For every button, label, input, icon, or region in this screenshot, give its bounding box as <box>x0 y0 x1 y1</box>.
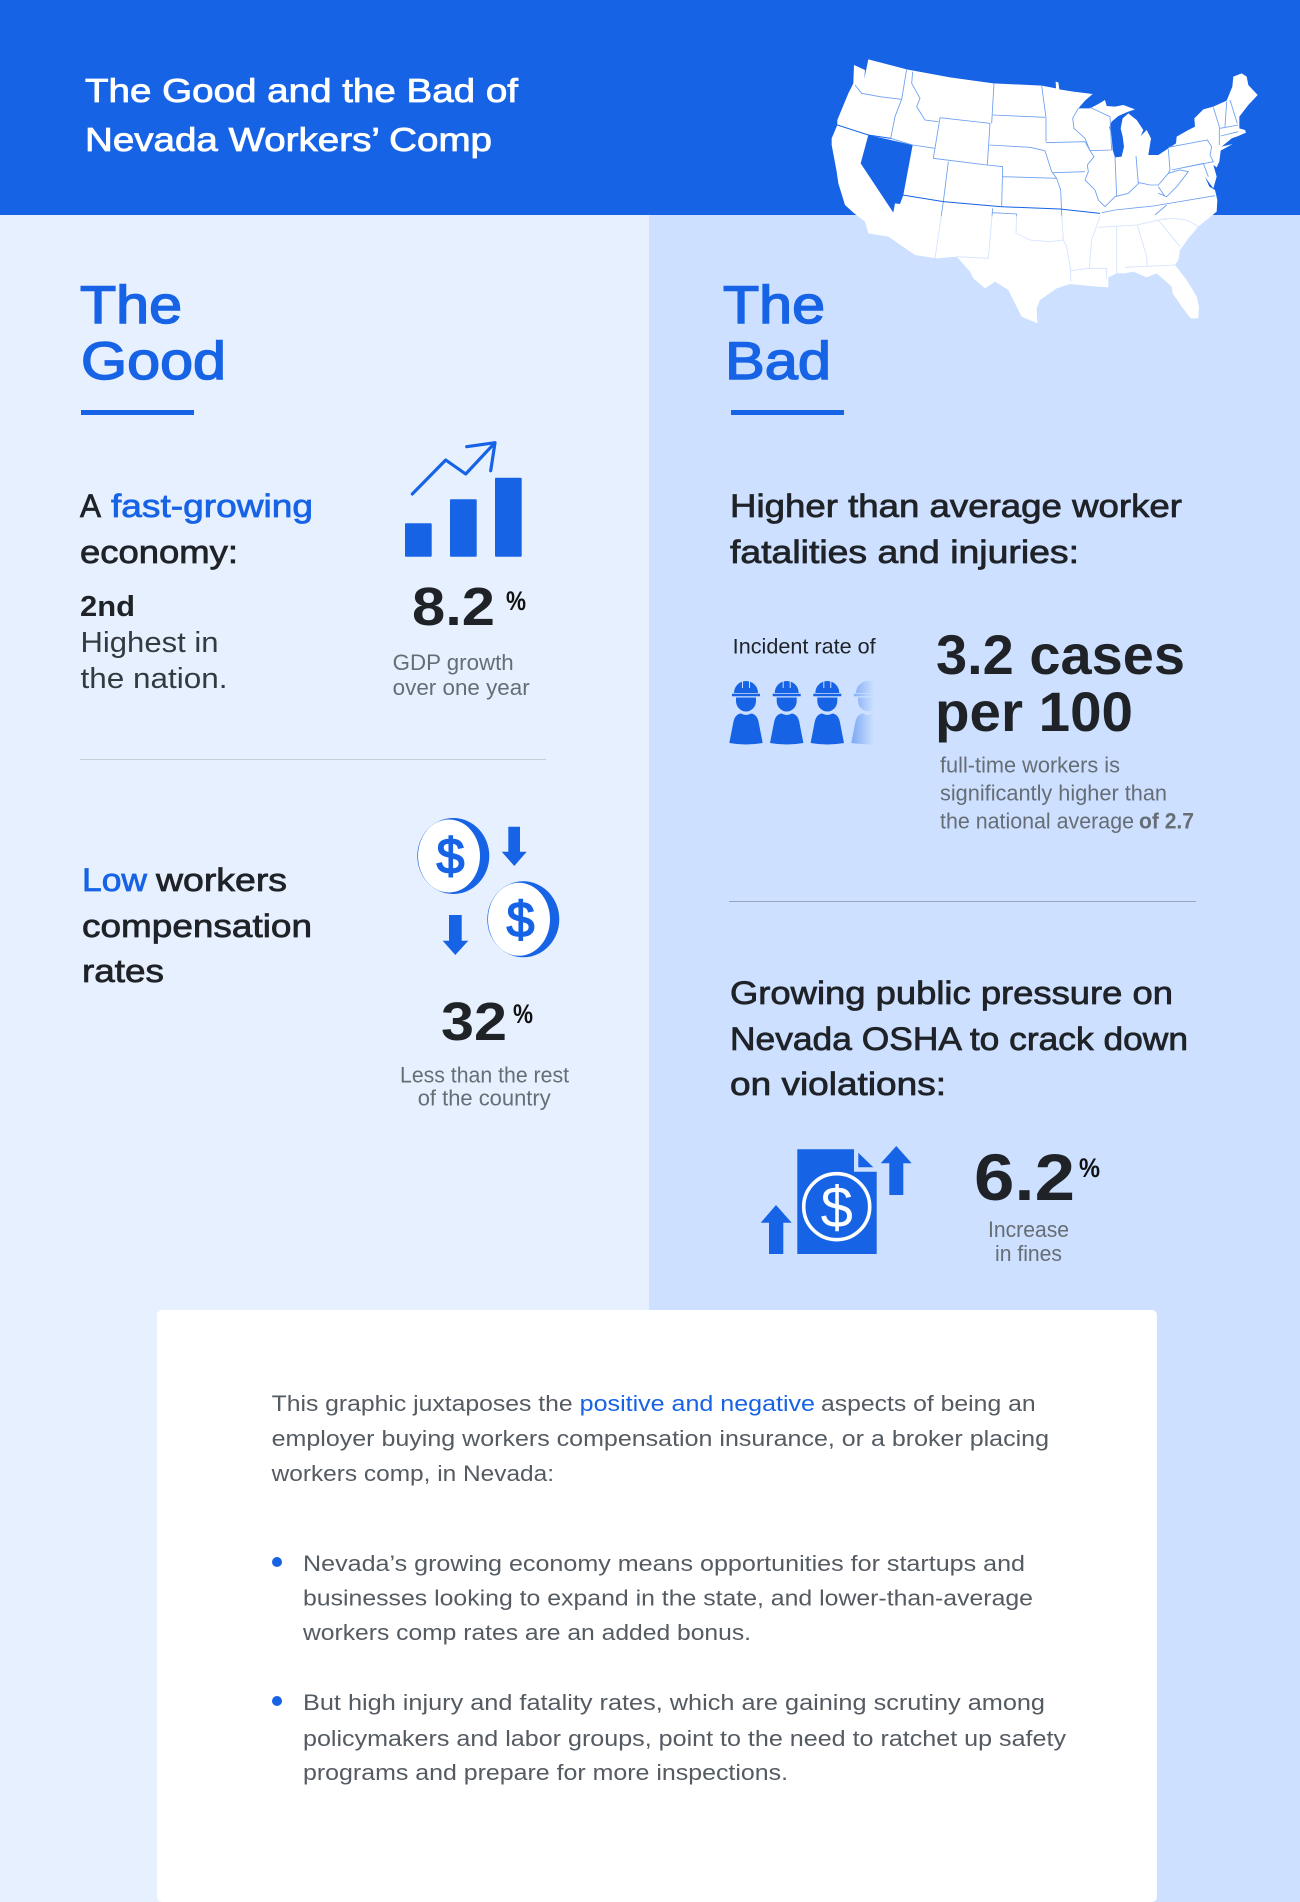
icon: falling dollar coins: $ <box>507 891 534 947</box>
intro text: positive and negative <box>580 1391 815 1416</box>
stat: 8.2% GDP growth: GDP growth <box>393 650 514 675</box>
text block: low workers compensation rates: Low <box>82 862 148 898</box>
stat: 32% less than the rest: of the country <box>418 1086 551 1110</box>
bullet: growing economy <box>272 1551 1033 1645</box>
stat: 3.2 cases per 100: the national average <box>940 808 1134 834</box>
text block: fast-growing economy: the nation. <box>80 663 228 695</box>
text block: fast-growing economy: Highest in <box>80 627 218 659</box>
stat: 3.2 cases per 100: of 2.7 <box>1139 808 1194 834</box>
stat: 3.2 cases per 100: 3.2 cases <box>936 623 1185 686</box>
text block: higher fatalities <box>730 488 1182 570</box>
heading: The Bad: Bad <box>725 332 831 391</box>
stat: 32% less than the rest: Less than the rest <box>400 1062 569 1088</box>
intro text <box>271 1391 1049 1486</box>
stat: 6.2% increase in fines: in fines <box>995 1241 1062 1266</box>
panel: summary card <box>157 1310 1157 1902</box>
title <box>85 72 519 158</box>
heading: The Good <box>80 276 226 415</box>
stat: 8.2% GDP growth <box>393 577 530 700</box>
icon: fine document with up arrows <box>761 1146 912 1254</box>
heading: The Good: The <box>80 276 182 335</box>
bullet: growing economy: businesses looking to expand in the state, and lower-than-average <box>303 1586 1033 1610</box>
stat: 32% less than the rest <box>400 992 569 1110</box>
bullet: growing economy: workers comp rates are an added bonus. <box>302 1620 751 1645</box>
text block: public pressure <box>730 975 1188 1102</box>
stat: 8.2% GDP growth: % <box>506 586 526 616</box>
stat: 6.2% increase in fines: Increase <box>988 1217 1069 1242</box>
icon: fine document with up arrows: $ <box>821 1175 853 1240</box>
bullet: injury and fatality rates: programs and prepare for more inspections. <box>303 1760 788 1785</box>
text block: fast-growing economy: A <box>80 488 102 524</box>
heading: The Good: Good <box>81 332 226 391</box>
stat: 3.2 cases per 100: per 100 <box>935 680 1133 743</box>
stat: 6.2% increase in fines <box>974 1140 1100 1266</box>
text block: fast-growing economy <box>80 488 313 695</box>
intro text: aspects of being an <box>821 1391 1036 1416</box>
title: Nevada Workers’ Comp <box>85 121 492 158</box>
icon: US map with Nevada highlighted <box>832 59 1258 323</box>
icon: workers in hard hats <box>729 681 874 744</box>
intro text: employer buying workers compensation insurance, or a broker placing <box>272 1426 1049 1451</box>
text block: low workers compensation rates: workers <box>155 862 287 898</box>
text block: low workers compensation rates <box>82 862 312 989</box>
title: The Good and the Bad of <box>85 72 519 109</box>
panel: the bad <box>723 276 1196 1266</box>
bullet: injury and fatality rates: policymakers and labor groups, point to the need to ratchet up safety <box>303 1726 1067 1751</box>
text block: public pressure: on violations: <box>730 1066 946 1102</box>
stat: 8.2% GDP growth: 8.2 <box>412 577 495 637</box>
text block: low workers compensation rates: compensation <box>82 908 312 944</box>
bullet: injury and fatality rates <box>272 1690 1067 1785</box>
panel: the good <box>80 276 569 1110</box>
stat: 8.2% GDP growth: over one year <box>393 675 530 700</box>
text block: low workers compensation rates: rates <box>82 953 164 989</box>
text block: higher fatalities: fatalities and injuries: <box>730 534 1079 570</box>
heading: The Bad <box>723 276 844 415</box>
intro text: This graphic juxtaposes the <box>272 1391 573 1416</box>
bullet: growing economy: Nevada’s growing economy means opportunities for startups and <box>303 1551 1025 1576</box>
text block: fast-growing economy: economy: <box>80 534 238 570</box>
bullet: injury and fatality rates: But high injury and fatality rates, which are gaining scrutiny among <box>303 1690 1045 1715</box>
intro text: workers comp, in Nevada: <box>271 1461 554 1486</box>
stat: 6.2% increase in fines: 6.2 <box>974 1140 1075 1214</box>
stat: 32% less than the rest: % <box>513 999 533 1029</box>
text block: public pressure: Nevada OSHA to crack down <box>730 1021 1188 1057</box>
stat: 3.2 cases per 100: full-time workers is <box>940 752 1120 778</box>
text block: fast-growing economy: 2nd <box>80 591 135 623</box>
text block: public pressure: Growing public pressure on <box>730 975 1173 1011</box>
stat: 3.2 cases per 100: significantly higher than <box>940 780 1167 806</box>
text block: higher fatalities: Higher than average worker <box>730 488 1182 524</box>
stat: 6.2% increase in fines: % <box>1079 1153 1100 1183</box>
heading: The Bad: The <box>723 276 825 335</box>
icon: falling dollar coins: $ <box>437 828 464 884</box>
stat: 3.2 cases per 100 <box>935 623 1194 834</box>
panel: the bad background <box>649 215 1300 1902</box>
panel: the good background <box>0 215 649 1902</box>
stat: 32% less than the rest: 32 <box>441 992 507 1052</box>
header band <box>0 0 1300 215</box>
icon: falling dollar coins <box>417 818 559 957</box>
label: incident rate: Incident rate of <box>733 635 876 658</box>
icon: rising bar chart <box>405 443 522 557</box>
text block: fast-growing economy: fast-growing <box>111 488 313 524</box>
